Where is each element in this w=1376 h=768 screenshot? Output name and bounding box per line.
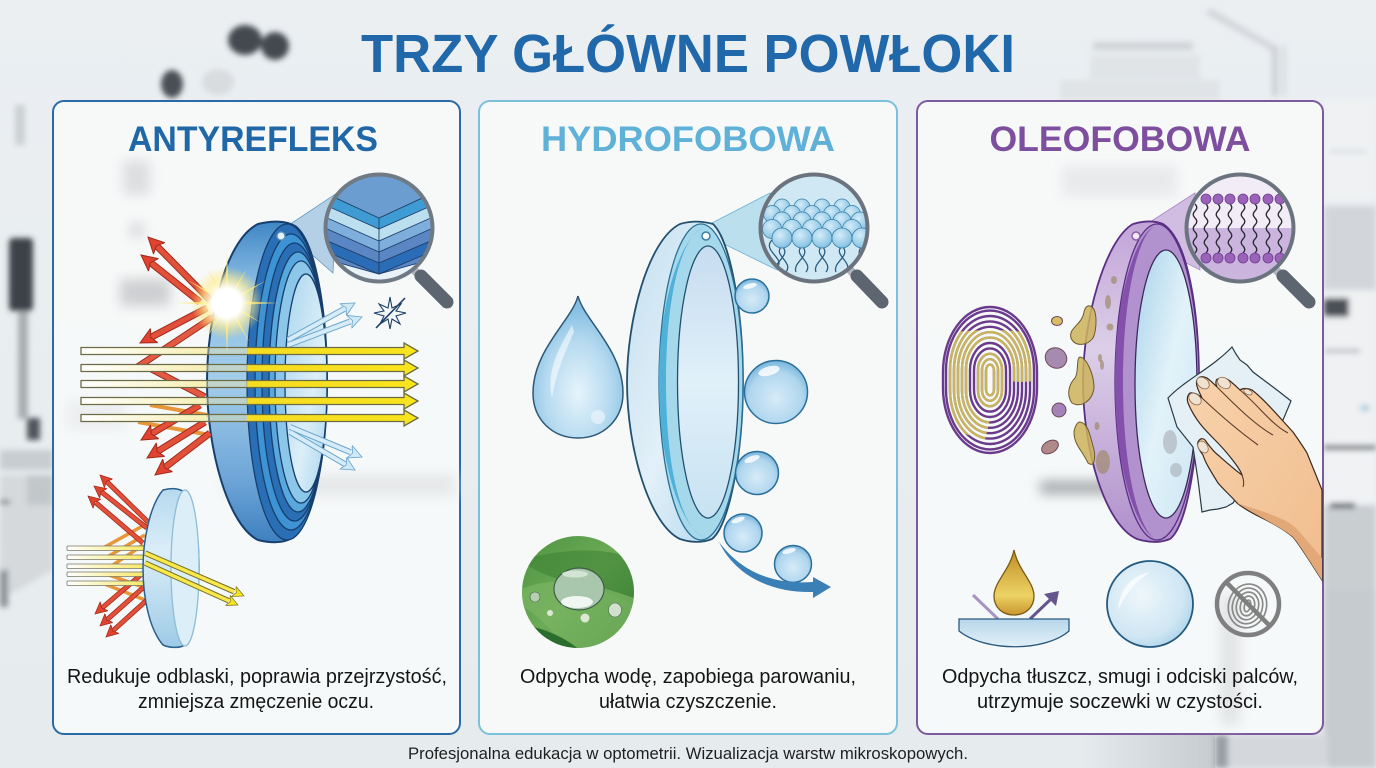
water beads on lens bbox=[724, 279, 812, 582]
hydrophobic lens bbox=[627, 222, 743, 542]
description bbox=[67, 666, 447, 713]
zoom cone bbox=[708, 193, 777, 270]
magnifier: anti-reflective layers bbox=[325, 172, 447, 302]
tissue bbox=[1168, 347, 1291, 512]
fingerprint bbox=[943, 307, 1037, 453]
icon: no fingerprints bbox=[1217, 573, 1279, 635]
zoom cone bbox=[1147, 193, 1200, 270]
roll-off arrow bbox=[719, 542, 831, 598]
description: Odpycha tłuszcz, smugi i odciski palców, bbox=[942, 666, 1298, 688]
heading: antyrefleks: ANTYREFLEKS bbox=[128, 120, 378, 159]
title: TRZY GŁÓWNE POWŁOKI bbox=[361, 24, 1015, 84]
heading: oleofobowa: OLEOFOBOWA bbox=[990, 120, 1250, 159]
oleophobic lens bbox=[1083, 221, 1199, 542]
reflected red arrows bbox=[138, 237, 213, 475]
heading: hydrofobowa: HYDROFOBOWA bbox=[541, 120, 835, 159]
panel: hydrofobowa bbox=[479, 101, 897, 734]
large multilayer lens bbox=[207, 222, 327, 542]
description: Redukuje odblaski, poprawia przejrzystość, bbox=[67, 666, 447, 688]
yellow light rays bbox=[81, 343, 418, 426]
water drop bbox=[533, 296, 623, 438]
magnifier: hydrophobic molecules bbox=[760, 174, 882, 302]
description: utrzymuje soczewki w czystości. bbox=[977, 691, 1263, 713]
pale transmitted arrows bbox=[288, 303, 362, 470]
icon: clean lens bbox=[1107, 561, 1193, 647]
oil droplets bbox=[1039, 316, 1071, 457]
description: Odpycha wodę, zapobiega parowaniu, bbox=[520, 666, 856, 688]
panel: antyrefleks bbox=[53, 101, 460, 734]
small lens diagram bbox=[67, 475, 244, 647]
magnifier: oleophobic molecules bbox=[1186, 174, 1309, 302]
icon: no-glare spark bbox=[374, 297, 406, 329]
zoom cone bbox=[292, 193, 337, 273]
oil smears on lens edge bbox=[1069, 306, 1096, 464]
description: zmniejsza zmęczenie oczu. bbox=[138, 691, 374, 713]
glare flash bbox=[176, 252, 278, 354]
hand bbox=[1186, 375, 1322, 580]
footer caption: Profesjonalna edukacja w optometrii. Wizualizacja warstw mikroskopowych. bbox=[408, 744, 968, 763]
leaf with droplets bbox=[522, 536, 634, 648]
description: ułatwia czyszczenie. bbox=[599, 691, 777, 713]
description bbox=[942, 666, 1298, 713]
description bbox=[520, 666, 856, 713]
panel: oleofobowa bbox=[917, 101, 1323, 734]
icon: oil drop repelled bbox=[959, 550, 1069, 647]
